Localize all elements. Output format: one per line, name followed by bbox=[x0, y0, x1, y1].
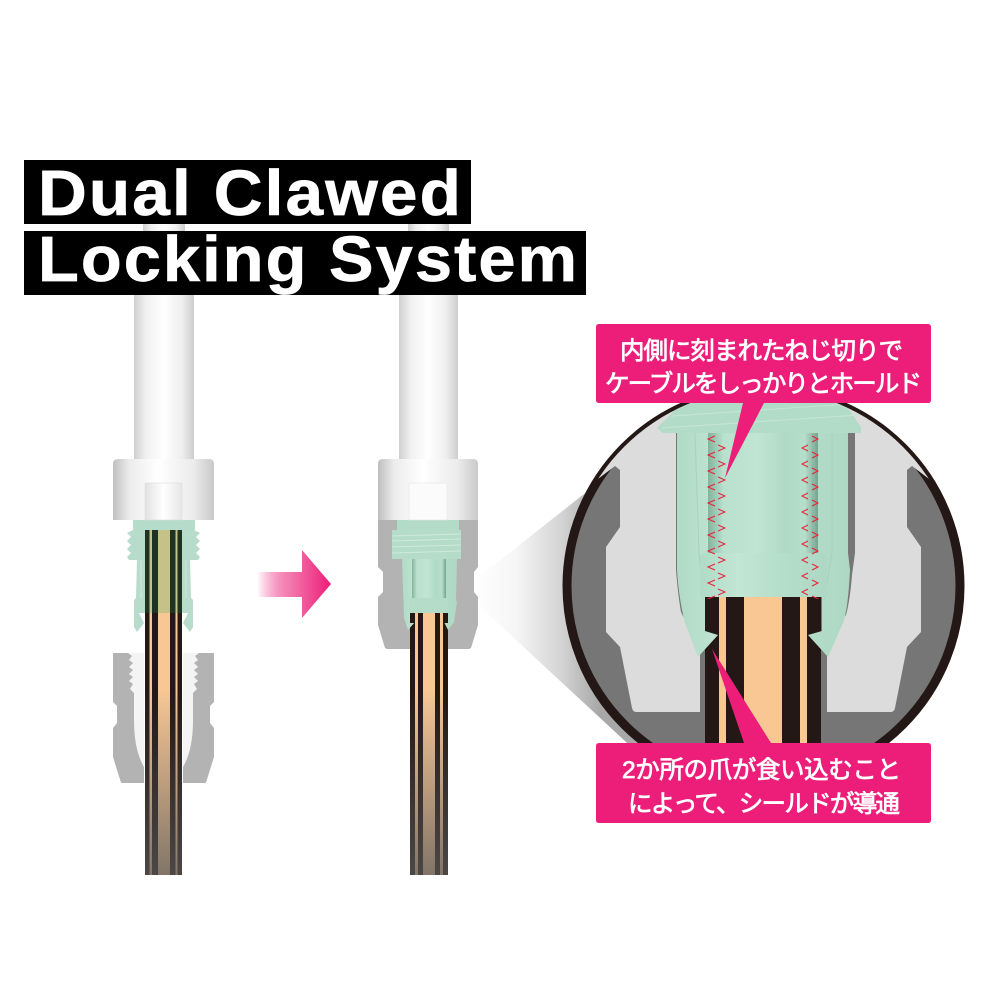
left white nut bbox=[113, 459, 214, 520]
callout: top: ケーブルをしっかりとホールド bbox=[605, 370, 922, 398]
centre white nut bbox=[378, 459, 478, 520]
left white tube bbox=[134, 224, 194, 461]
arrow bbox=[257, 550, 331, 618]
magnified detail circle bbox=[562, 403, 964, 743]
red thread marks bbox=[708, 436, 818, 602]
left lower grey connector body bbox=[113, 653, 214, 783]
centre grey connector body bbox=[378, 520, 478, 649]
light grey connector sections bbox=[598, 403, 929, 712]
callout: top: 内側に刻まれたねじ切りで bbox=[620, 337, 903, 365]
left cable bbox=[145, 525, 182, 875]
magnifier cone bbox=[462, 450, 640, 755]
lens contents bbox=[598, 403, 929, 743]
left mint clawed ferrule bbox=[127, 520, 200, 632]
callout: bottom bbox=[596, 649, 931, 823]
centre cable bbox=[410, 610, 448, 875]
left cable assembly bbox=[113, 224, 214, 875]
callout: bottom: によって、シールドが導通 bbox=[628, 790, 900, 818]
centre white tube bbox=[399, 224, 458, 461]
callout: bottom: 2か所の爪が食い込むこと bbox=[622, 756, 901, 784]
title line 1: Dual Clawed bbox=[38, 157, 463, 229]
centre mint ferrule bbox=[392, 520, 461, 630]
mint claws and body bbox=[657, 400, 861, 657]
title bbox=[24, 157, 586, 295]
ring and grey background bbox=[567, 390, 960, 782]
callout: top bbox=[596, 324, 931, 478]
centre cable assembly bbox=[378, 224, 478, 875]
title line 2: Locking System bbox=[38, 223, 579, 295]
magnified cable bbox=[705, 595, 821, 755]
